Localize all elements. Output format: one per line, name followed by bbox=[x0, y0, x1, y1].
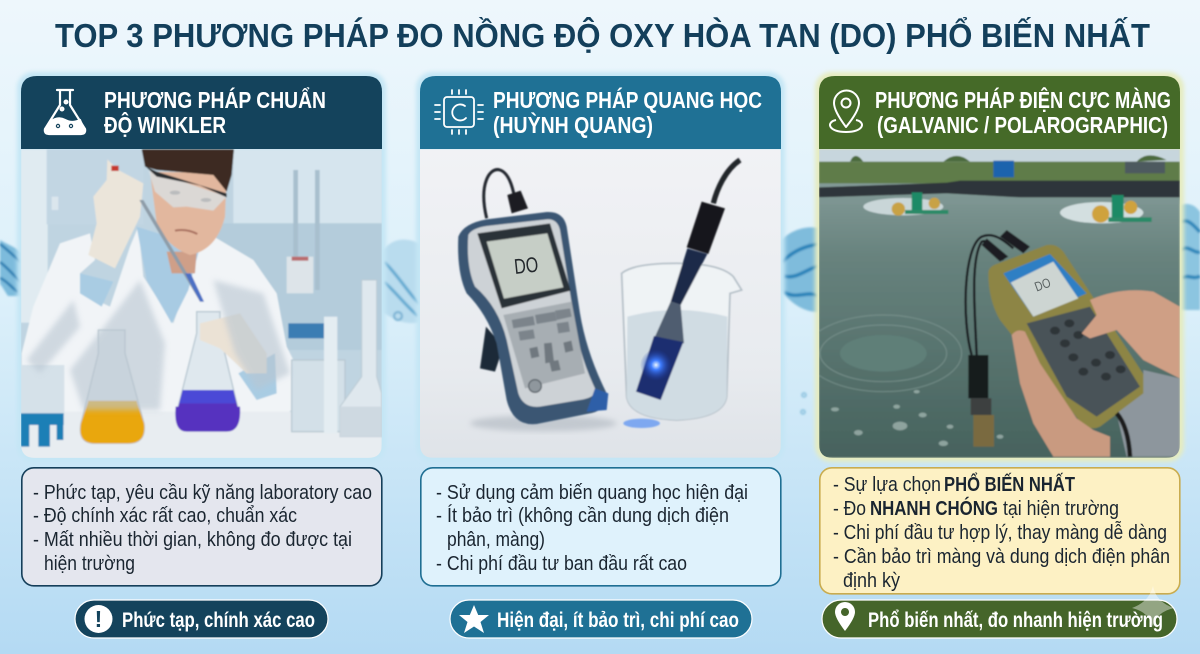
icon: location pin bbox=[830, 90, 862, 132]
icon: exclamation bbox=[84, 605, 112, 633]
text box: membrane: - Đo bbox=[833, 497, 866, 520]
text box: membrane: - Sự lựa chọn bbox=[833, 473, 941, 496]
panel: Winkler method bbox=[17, 72, 386, 462]
header text bbox=[493, 86, 762, 138]
handheld meter display label: DO bbox=[1033, 275, 1053, 294]
meter display label: DO bbox=[513, 253, 539, 279]
photo: chemist in laboratory bbox=[21, 149, 382, 458]
icon: exclamation: ! bbox=[95, 606, 102, 632]
header: membrane bbox=[819, 76, 1180, 149]
icon: pin bbox=[835, 602, 855, 631]
coat shading bbox=[27, 280, 290, 410]
header text bbox=[875, 86, 1171, 138]
header: Winkler bbox=[21, 76, 382, 149]
header text: ĐỘ WINKLER bbox=[104, 111, 226, 138]
icon: optical sensor chip bbox=[435, 90, 483, 134]
text box: optical: phân, màng) bbox=[447, 528, 545, 551]
summary pill: optical bbox=[450, 600, 752, 638]
text box: Winkler: - Mất nhiều thời gian, không đo được tại bbox=[33, 528, 352, 551]
header text bbox=[104, 86, 326, 138]
header text: PHƯƠNG PHÁP QUANG HỌC bbox=[493, 86, 762, 113]
text box: optical: - Ít bảo trì (không cần dung dịch điện bbox=[436, 504, 729, 527]
text box: membrane: định kỳ bbox=[843, 569, 901, 592]
summary pill: membrane bbox=[822, 600, 1177, 638]
text box: Winkler: hiện trường bbox=[44, 552, 135, 575]
photo: field measurement at shrimp pond bbox=[805, 149, 1180, 458]
icon: flask bbox=[45, 90, 85, 134]
header text: PHƯƠNG PHÁP CHUẨN bbox=[104, 86, 326, 113]
text box: optical bbox=[421, 468, 781, 586]
text box: membrane: NHANH CHÓNG bbox=[870, 496, 998, 520]
text box: Winkler: - Phức tạp, yêu cầu kỹ năng laboratory cao bbox=[33, 481, 372, 504]
text box: Winkler: - Độ chính xác rất cao, chuẩn xác bbox=[33, 504, 297, 527]
photo: optical DO meter and probe in beaker bbox=[420, 149, 781, 458]
text box: membrane: tại hiện trường bbox=[1003, 497, 1119, 520]
icon: star bbox=[459, 605, 489, 633]
panel: membrane electrode method bbox=[805, 72, 1184, 462]
header text: (HUỲNH QUANG) bbox=[493, 111, 653, 138]
header: optical bbox=[420, 76, 781, 149]
title: TOP 3 PHƯƠNG PHÁP ĐO NỒNG ĐỘ OXY HÒA TAN (DO) PHỔ BIẾN NHẤT bbox=[55, 16, 1150, 54]
text box: membrane bbox=[820, 468, 1180, 594]
text box: Winkler bbox=[22, 468, 382, 586]
text box: optical: - Sử dụng cảm biến quang học hiện đại bbox=[436, 481, 748, 504]
panel: optical method bbox=[416, 72, 785, 462]
pill text: Phức tạp, chính xác cao bbox=[122, 609, 315, 632]
water splashes bbox=[0, 204, 1200, 414]
text box: membrane: PHỔ BIẾN NHẤT bbox=[944, 472, 1075, 496]
sparkle watermark bbox=[1132, 586, 1174, 627]
summary pill: Winkler bbox=[75, 600, 328, 638]
text box: optical: - Chi phí đầu tư ban đầu rất cao bbox=[436, 552, 687, 575]
pill text: Hiện đại, ít bảo trì, chi phí cao bbox=[497, 609, 739, 632]
